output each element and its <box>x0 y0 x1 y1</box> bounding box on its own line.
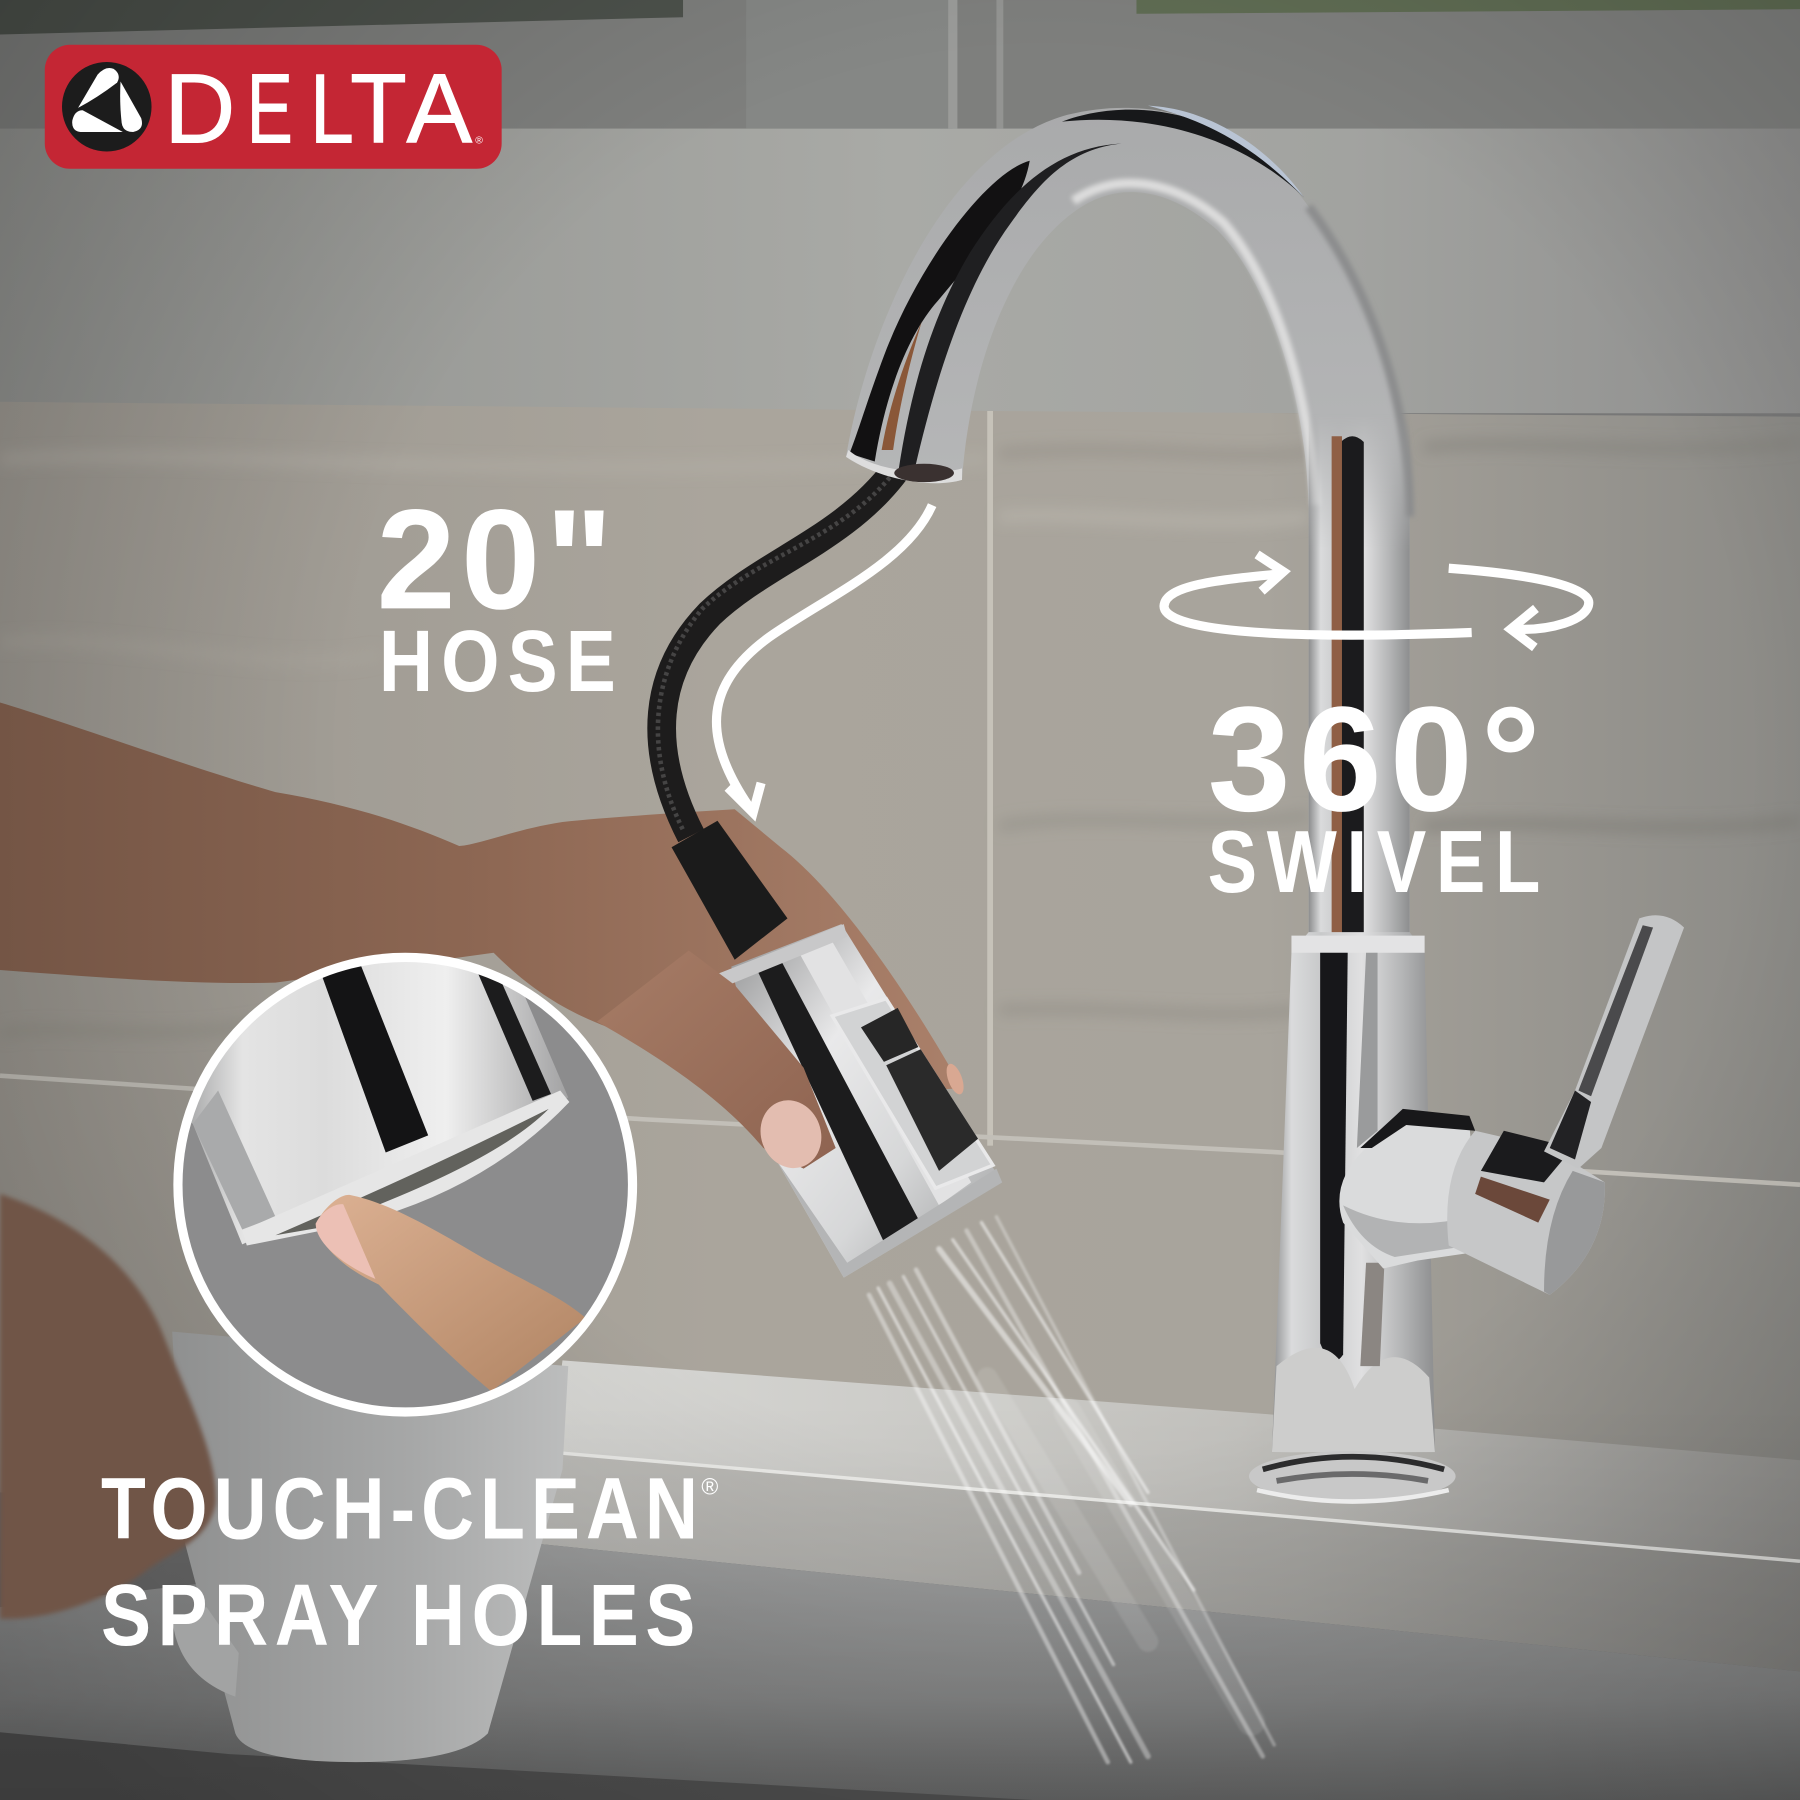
faucet gooseneck spout <box>846 106 1410 953</box>
water spray <box>869 1217 1274 1762</box>
hand and arm <box>0 703 967 1154</box>
faucet valve body <box>1339 1109 1605 1295</box>
inset: sprayer head close-up <box>192 962 570 1246</box>
faucet lower body <box>1249 932 1456 1502</box>
pull-down sprayer <box>707 924 1002 1278</box>
DELTA wordmark: L <box>310 53 354 163</box>
DELTA wordmark <box>164 53 472 164</box>
hose connector <box>672 821 788 960</box>
DELTA wordmark: E <box>247 54 293 164</box>
hose arrow <box>716 505 932 813</box>
360 degree swivel label: 360° <box>1208 675 1541 842</box>
20 inch hose label <box>377 480 616 710</box>
coffee mug <box>172 1332 568 1762</box>
20 inch hose label: HOSE <box>379 613 616 710</box>
DELTA wordmark: A <box>406 53 472 163</box>
thumb gripping sprayer <box>597 951 836 1177</box>
DELTA logo: ® <box>475 135 483 146</box>
touch-clean spray holes label: TOUCH-CLEAN <box>101 1460 698 1558</box>
faucet lever handle <box>1544 915 1684 1169</box>
touch-clean spray holes label <box>101 1460 718 1664</box>
lower left hand <box>0 1194 216 1619</box>
hose <box>658 471 895 836</box>
DELTA wordmark: T <box>350 54 407 164</box>
touch-clean spray holes label: ® <box>701 1474 718 1500</box>
360 degree swivel label: SWIVEL <box>1208 813 1540 911</box>
DELTA logo <box>45 45 502 169</box>
faucet <box>846 106 1684 1502</box>
inset: touch-clean spray holes <box>161 918 633 1412</box>
inset: fingertip <box>316 1195 585 1391</box>
touch-clean spray holes label: SPRAY HOLES <box>101 1567 695 1664</box>
20 inch hose label: 20" <box>377 480 613 639</box>
icon: Delta triangle mark <box>72 68 142 132</box>
DELTA wordmark: D <box>164 53 235 163</box>
swivel arrows <box>1164 554 1589 647</box>
